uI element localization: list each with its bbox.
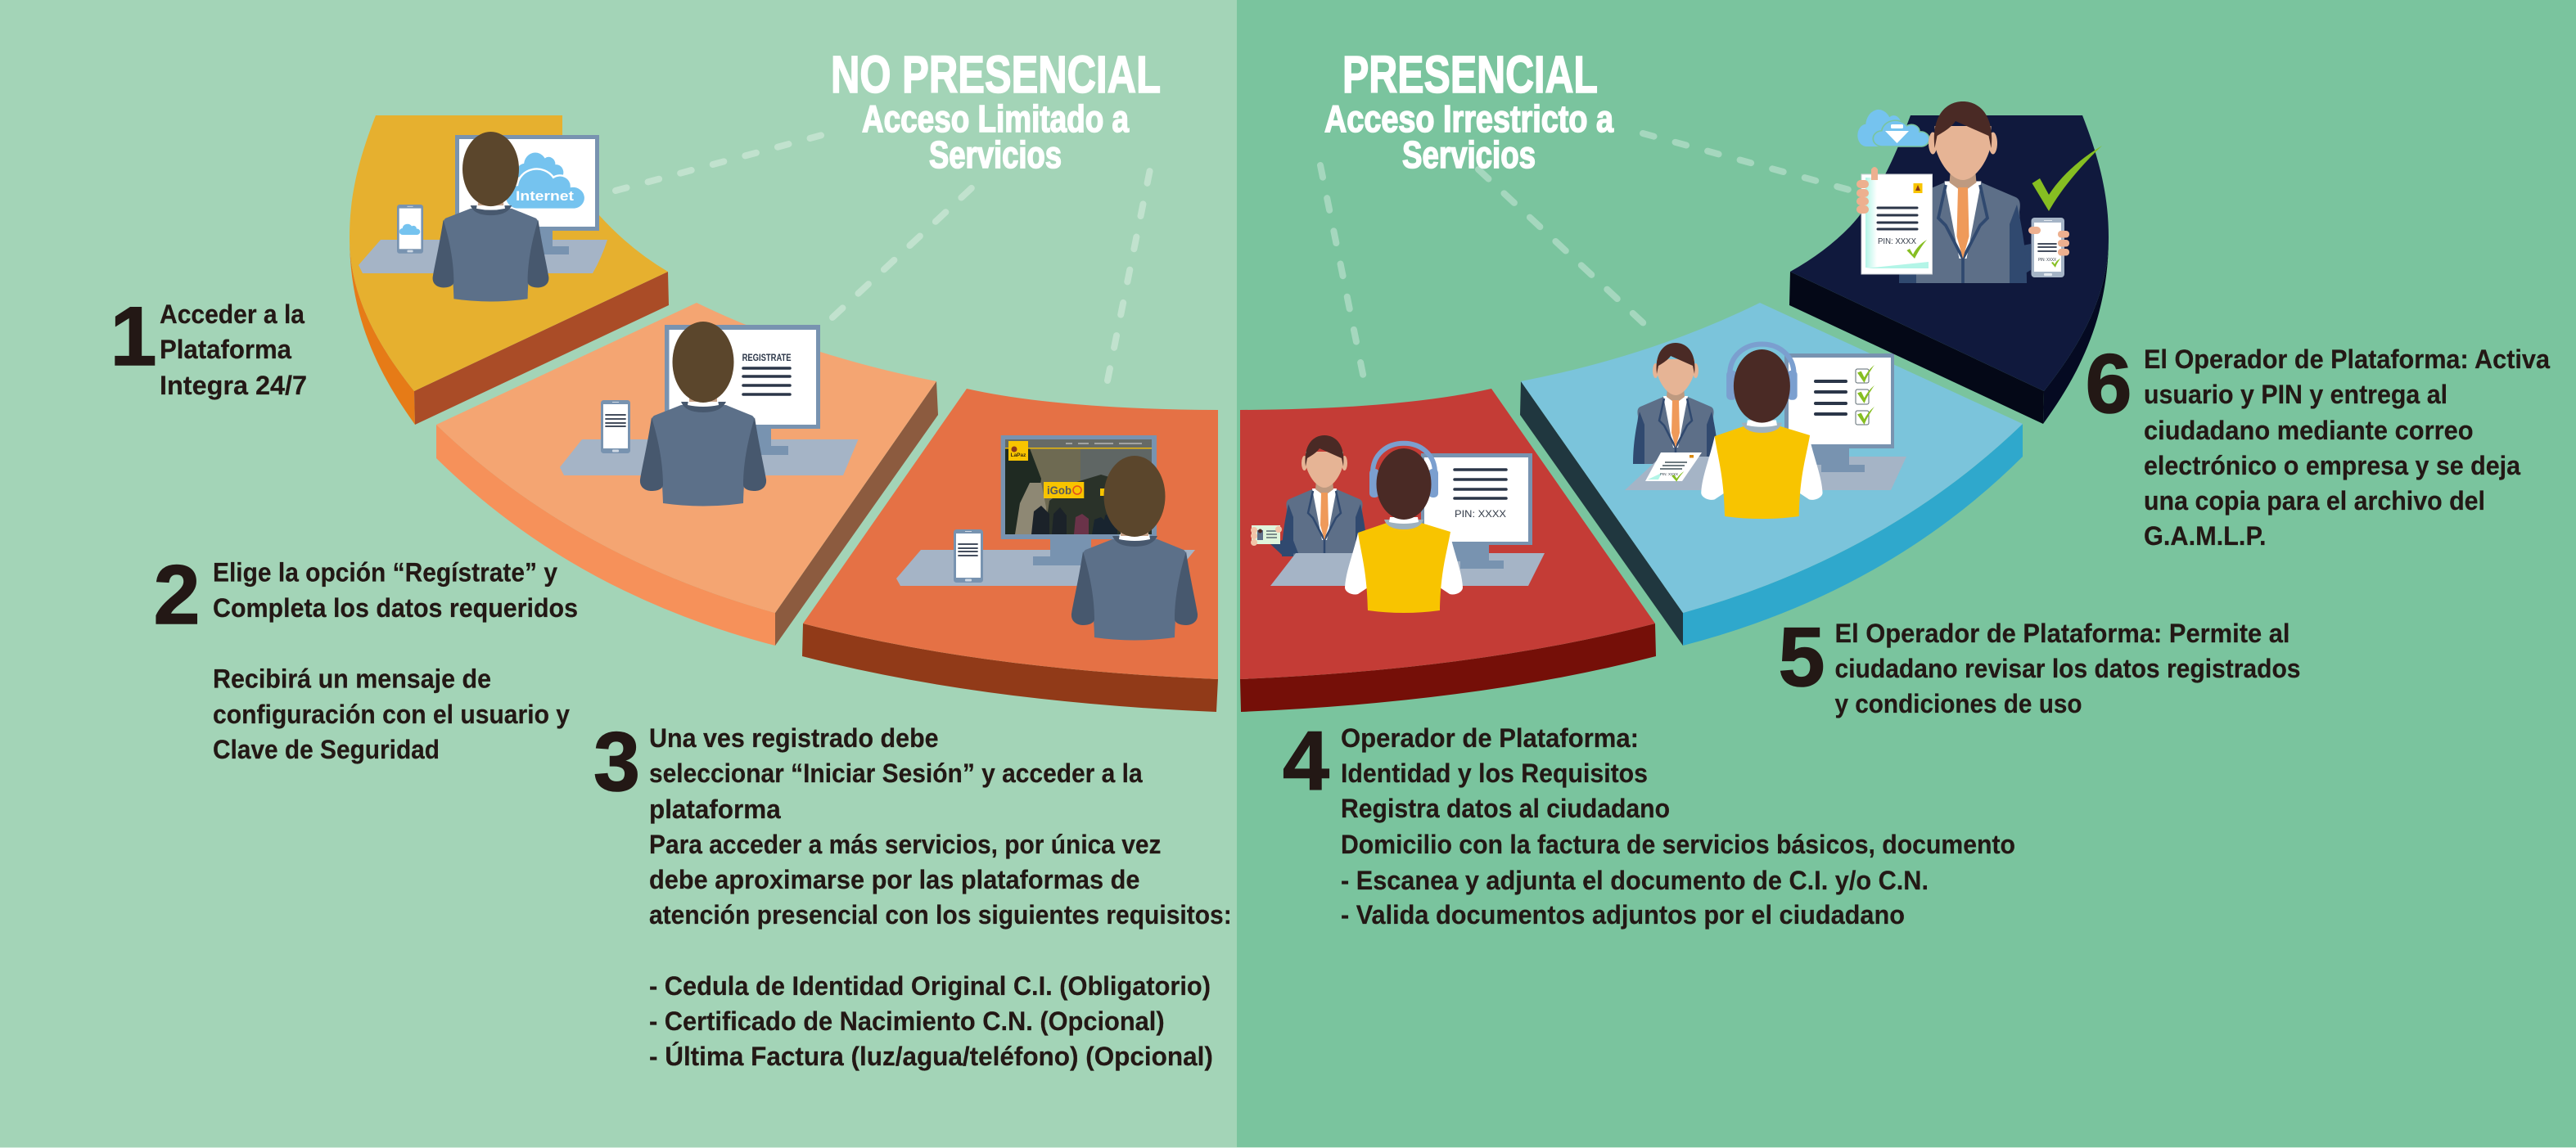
- step 2 text: [154, 548, 578, 764]
- heading: presencial: Servicios: [1402, 133, 1536, 176]
- monitor 1: Internet: [516, 188, 574, 204]
- step 4 text: 4: [1283, 714, 1329, 808]
- step 2 text: Elige la opción “Regístrate” y: [213, 558, 557, 588]
- heading: no presencial: Acceso Limitado a: [862, 97, 1129, 140]
- phone 6: PIN: XXXX: [2038, 258, 2057, 263]
- step 6 text: [2086, 337, 2550, 551]
- icon: big check mark: [2032, 146, 2102, 211]
- person 2: [640, 322, 766, 506]
- step 6 text: 6: [2086, 337, 2132, 430]
- step 5 text: ciudadano revisar los datos registrados: [1835, 654, 2300, 683]
- step 4 text: Registra datos al ciudadano: [1341, 794, 1670, 823]
- step 6 text: G.A.M.L.P.: [2144, 521, 2266, 551]
- step 6 text: ciudadano mediante correo: [2144, 416, 2474, 445]
- step 5 text: El Operador de Plataforma: Permite al: [1835, 619, 2290, 648]
- step 2 text: configuración con el usuario y: [213, 700, 570, 729]
- step 3 text: 3: [593, 715, 640, 808]
- heading: presencial: Acceso Irrestricto a: [1324, 97, 1613, 140]
- step 4 text: [1283, 714, 2015, 930]
- citizen 4: [1345, 443, 1463, 613]
- desk 1: [359, 240, 607, 273]
- step 3 text: debe aproximarse por las plataformas de: [649, 865, 1139, 894]
- panel: step 3 block, login: [802, 389, 1218, 712]
- dashed connectors: [616, 133, 1858, 382]
- person 1: [433, 132, 548, 301]
- step 4 text: Operador de Plataforma:: [1341, 723, 1639, 753]
- monitor 3 with website: iGob: [1047, 484, 1071, 497]
- operator 6: [1899, 101, 2031, 283]
- step 6 text: una copia para el archivo del: [2144, 486, 2485, 515]
- id card: [1251, 525, 1282, 546]
- step 5 text: [1779, 610, 2300, 718]
- monitor 4: [1421, 453, 1532, 569]
- step 1 text: Plataforma: [160, 335, 291, 364]
- panel: step 6 block, delivers credentials: [1789, 101, 2109, 424]
- step 6 text: usuario y PIN y entrega al: [2144, 380, 2447, 409]
- step 5 text: 5: [1779, 610, 1825, 704]
- phone 2: [601, 400, 630, 453]
- panel: step 1 block, internet access: [350, 115, 669, 425]
- monitor 2: REGISTRATE: [742, 352, 792, 363]
- step 3 text: [593, 715, 1232, 1071]
- operator 5: [1633, 343, 1718, 464]
- document on desk: PIN: XXXX: [1660, 472, 1678, 476]
- step 2 text: Completa los datos requeridos: [213, 593, 578, 623]
- monitor 3 with website: [1001, 435, 1157, 565]
- panel: step 5 block, citizen reviews: [1520, 303, 2023, 646]
- step 1 text: 1: [111, 290, 156, 383]
- heading: presencial: PRESENCIAL: [1342, 45, 1598, 104]
- step 5 text: y condiciones de uso: [1835, 689, 2082, 718]
- phone 3: [954, 529, 983, 583]
- step 1 text: Acceder a la: [160, 299, 305, 329]
- step 3 text: atención presencial con los siguientes requisitos:: [649, 900, 1232, 930]
- step 4 text: Identidad y los Requisitos: [1341, 759, 1648, 788]
- step 3 text: Una ves registrado debe: [649, 723, 939, 753]
- step 6 text: electrónico o empresa y se deja: [2144, 451, 2520, 480]
- monitor 2: [665, 325, 820, 455]
- step 4 text: - Valida documentos adjuntos por el ciudadano: [1341, 900, 1905, 930]
- document with PIN: PIN: XXXX: [1878, 236, 1916, 246]
- desk 5: [1625, 457, 1906, 490]
- step 3 text: Para acceder a más servicios, por única vez: [649, 830, 1161, 859]
- panel: step 2 block, register: [436, 303, 938, 646]
- step 2 text: Clave de Seguridad: [213, 735, 440, 764]
- panel background: no presencial: [0, 0, 1237, 1148]
- monitor 5 with checklist: [1784, 353, 1894, 472]
- heading: no presencial: NO PRESENCIAL: [831, 45, 1161, 104]
- heading: no presencial: Servicios: [929, 133, 1062, 176]
- operator 4: [1270, 435, 1367, 556]
- desk 2: [560, 439, 858, 475]
- document with PIN: [1856, 167, 1932, 274]
- step 1 text: [111, 290, 307, 400]
- step 3 text: plataforma: [649, 795, 781, 824]
- panel background: presencial: [1237, 0, 2576, 1148]
- monitor 1: [455, 135, 599, 254]
- monitor 4: PIN: XXXX: [1455, 508, 1506, 520]
- step 3 text: - Certificado de Nacimiento C.N. (Opcional): [649, 1006, 1165, 1036]
- step 2 text: Recibirá un mensaje de: [213, 664, 491, 694]
- panel: step 4 block, operator registers: [1240, 389, 1656, 712]
- step 3 text: - Cedula de Identidad Original C.I. (Obligatorio): [649, 971, 1211, 1001]
- monitor 3 with website: LaPaz: [1011, 452, 1026, 458]
- step 3 text: seleccionar “Iniciar Sesión” y acceder a la: [649, 759, 1143, 788]
- phone 6: [2028, 218, 2069, 277]
- heading: presencial: [1324, 45, 1613, 176]
- step 4 text: Domicilio con la factura de servicios básicos, documento: [1341, 830, 2015, 859]
- step 4 text: - Escanea y adjunta el documento de C.I. y/o C.N.: [1341, 866, 1929, 895]
- desk 3: [896, 550, 1195, 586]
- step 1 text: Integra 24/7: [160, 371, 307, 400]
- step 2 text: 2: [154, 548, 200, 642]
- heading: no presencial: [831, 45, 1161, 176]
- citizen 5: [1701, 344, 1823, 519]
- desk 4: [1270, 553, 1545, 586]
- step 3 text: - Última Factura (luz/agua/teléfono) (Opcional): [649, 1042, 1213, 1071]
- document on desk: [1645, 452, 1702, 482]
- step 6 text: El Operador de Plataforma: Activa: [2144, 344, 2550, 374]
- phone 1: [397, 205, 423, 254]
- person 3: [1071, 456, 1198, 640]
- icon: cloud download: [1857, 110, 1929, 146]
